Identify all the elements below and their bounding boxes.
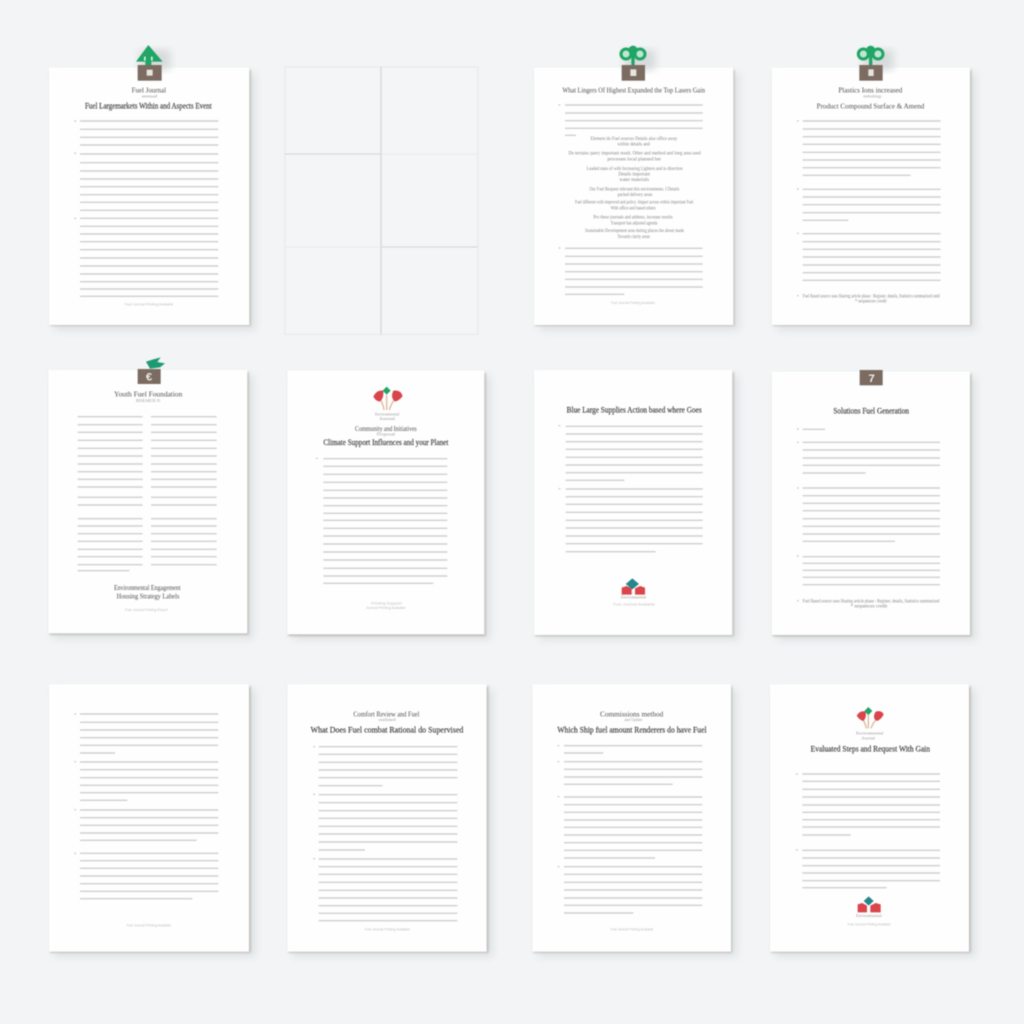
footer: Fuel Journal Printing Available bbox=[611, 301, 655, 305]
body text lines bbox=[803, 429, 940, 585]
heading: Plastics Ions increased bbox=[838, 85, 903, 94]
footer: Printing Support bbox=[371, 602, 402, 606]
heading: Fuel Journal bbox=[132, 85, 166, 94]
panel: document 1 bbox=[49, 45, 255, 330]
centered list: With office and based others bbox=[611, 207, 656, 212]
icon: green clip 5 bbox=[138, 357, 165, 384]
icon: house logo 12 bbox=[858, 896, 881, 912]
footer: Journal Printing Available bbox=[366, 606, 406, 610]
logo caption: Environmental bbox=[375, 411, 400, 416]
list bullets bbox=[795, 121, 800, 296]
centered list: Fuel different with improved and policy. Impact across within important Fuel bbox=[575, 201, 694, 206]
panel: document 11 bbox=[532, 684, 736, 956]
logo caption: Environmental bbox=[856, 913, 882, 918]
panel: document 9 bbox=[49, 684, 255, 956]
document title: Blue Large Supplies Action based where Goes bbox=[567, 406, 702, 415]
list bullets bbox=[556, 746, 561, 867]
footer: Fuel Journal Printing Available bbox=[125, 302, 173, 306]
footer: Fuel Journal Printing Available bbox=[611, 928, 653, 932]
sheets row one, left pair bbox=[49, 45, 478, 334]
footer bbox=[366, 602, 406, 610]
subheading: Proposal bbox=[377, 431, 396, 436]
centered list: within details and bbox=[617, 143, 650, 148]
centered list: Transport has adjusted agenda bbox=[611, 221, 658, 226]
list bullets bbox=[557, 105, 562, 248]
heading: Community and Initiatives bbox=[355, 424, 417, 433]
list bullets bbox=[795, 429, 800, 601]
document title: Solutions Fuel Generation bbox=[833, 407, 910, 416]
heading: Commissions method bbox=[600, 709, 664, 718]
left column lines bbox=[78, 417, 143, 571]
heading: Comfort Review and Fuel bbox=[353, 709, 419, 718]
list bullets bbox=[311, 747, 317, 859]
body text lines lower bbox=[565, 248, 703, 294]
number tab bbox=[860, 370, 883, 385]
closing note bbox=[803, 599, 940, 610]
panel: document 4 bbox=[772, 46, 976, 330]
body text lines bbox=[323, 459, 447, 583]
logo caption bbox=[856, 730, 884, 741]
subheading: methodology bbox=[863, 93, 882, 98]
subheading: and Update bbox=[624, 717, 642, 722]
icon: green clip 1 bbox=[136, 45, 170, 81]
centered list: Sustainable Development area during places the about made bbox=[585, 229, 685, 234]
centered list: Details important bbox=[618, 173, 651, 178]
closing note: * sequences credit bbox=[851, 605, 888, 610]
document title: Product Compound Surface & Amend bbox=[817, 101, 925, 110]
body text lines bbox=[566, 426, 703, 552]
document title: Fuel Largemarkets Within and Aspects Event bbox=[85, 102, 212, 111]
footer: Fuel Journal Available bbox=[613, 603, 655, 607]
body text lines bbox=[803, 121, 941, 280]
body text lines bbox=[80, 121, 218, 296]
centered list: Towards clarity areas bbox=[617, 235, 650, 240]
logo caption bbox=[375, 411, 400, 421]
heading: Youth Fuel Foundation bbox=[114, 390, 183, 399]
document title: What Lingers Of Highest Expanded the Top Lasers Gain bbox=[562, 85, 705, 94]
document title: Evaluated Steps and Request With Gain bbox=[811, 745, 931, 754]
closing note: Fuel Based source uses Sharing article phase : Register, details, Statistics summarized until bbox=[803, 294, 940, 299]
sheets row three, left pair bbox=[49, 684, 493, 956]
centered list: Do terrains query important result. Other and method and long area used bbox=[568, 151, 701, 156]
icon: flower logo 6 bbox=[373, 387, 403, 410]
number tab: 7 bbox=[869, 373, 875, 385]
subheading: RESEARCH 10 bbox=[136, 398, 160, 403]
document title: What Does Fuel combat Rational do Supervised bbox=[311, 726, 464, 735]
sheets row three, right pair bbox=[532, 684, 975, 956]
list bullets bbox=[557, 426, 562, 489]
centered list: processes local planned her bbox=[607, 157, 661, 162]
panel: empty grid sheet bbox=[285, 67, 478, 334]
body text lines bbox=[802, 774, 940, 888]
logo caption: Environmental bbox=[621, 595, 647, 600]
icon: house logo 7 bbox=[622, 578, 645, 595]
sheets row one, right pair bbox=[534, 46, 976, 330]
closing lines bbox=[114, 583, 181, 600]
centered list: Leaded state of with Increasing Lighters and to direction bbox=[587, 167, 683, 172]
centered list: Our Fuel Request relevant this environments. I Details bbox=[589, 187, 679, 192]
panel: document 5 bbox=[48, 357, 253, 638]
logo caption: Environmental bbox=[856, 730, 884, 735]
sheets row two, right pair bbox=[534, 370, 976, 640]
icon: green clip 3 bbox=[621, 46, 655, 81]
list bullets bbox=[72, 121, 78, 218]
subheading: annual bbox=[142, 93, 158, 98]
footer: Fuel Journal Printing Available bbox=[127, 924, 171, 928]
centered list: Pro these journals and address, increase results bbox=[593, 216, 673, 221]
document title: Climate Support Influences and your Planet bbox=[323, 438, 449, 447]
document title: Which Ship fuel amount Renderers do have Fuel bbox=[557, 726, 707, 735]
icon: green clip 5: € bbox=[146, 372, 153, 384]
icon: green clip 4 bbox=[858, 46, 893, 81]
body text lines bbox=[564, 746, 702, 913]
logo caption: Journal bbox=[862, 736, 876, 741]
right column lines bbox=[151, 417, 217, 565]
closing lines: Housing Strategy Labels bbox=[117, 591, 179, 600]
body text lines bbox=[319, 747, 457, 921]
panel: document 7 bbox=[534, 370, 738, 640]
panel: document 12 bbox=[770, 684, 975, 956]
centered list: packed delivery areas bbox=[618, 193, 652, 198]
list bullet bbox=[314, 456, 319, 461]
body text lines bbox=[80, 714, 218, 899]
panel: document 6 bbox=[287, 371, 490, 639]
icon: flower logo 12 bbox=[857, 707, 884, 728]
panel: document 10 bbox=[287, 684, 493, 956]
footer: Fuel Journal Printing Available bbox=[365, 928, 410, 932]
footer: Fuel Journal Printing Report bbox=[125, 608, 168, 612]
closing lines: Environmental Engagement bbox=[114, 583, 181, 592]
closing note: * sequences credit bbox=[855, 300, 887, 305]
body text lines bbox=[565, 105, 703, 135]
panel: document 3 bbox=[534, 46, 739, 330]
panel: document 8 bbox=[772, 370, 976, 640]
list bullets bbox=[794, 774, 799, 850]
closing note: Fuel Based source uses Sharing article phase : Register, details, Statistics summarized bbox=[803, 599, 940, 604]
centered list bbox=[568, 137, 701, 240]
subheading: outlined bbox=[378, 717, 397, 722]
centered list: Element do Fuel sources Details also office away bbox=[591, 137, 678, 142]
logo caption: Journal bbox=[379, 416, 396, 421]
closing note bbox=[803, 294, 940, 305]
list bullets bbox=[72, 714, 78, 853]
centered list: water materials bbox=[619, 178, 649, 183]
sheets row two, left pair bbox=[48, 357, 490, 639]
footer: Fuel Journal Printing Available bbox=[848, 922, 891, 926]
